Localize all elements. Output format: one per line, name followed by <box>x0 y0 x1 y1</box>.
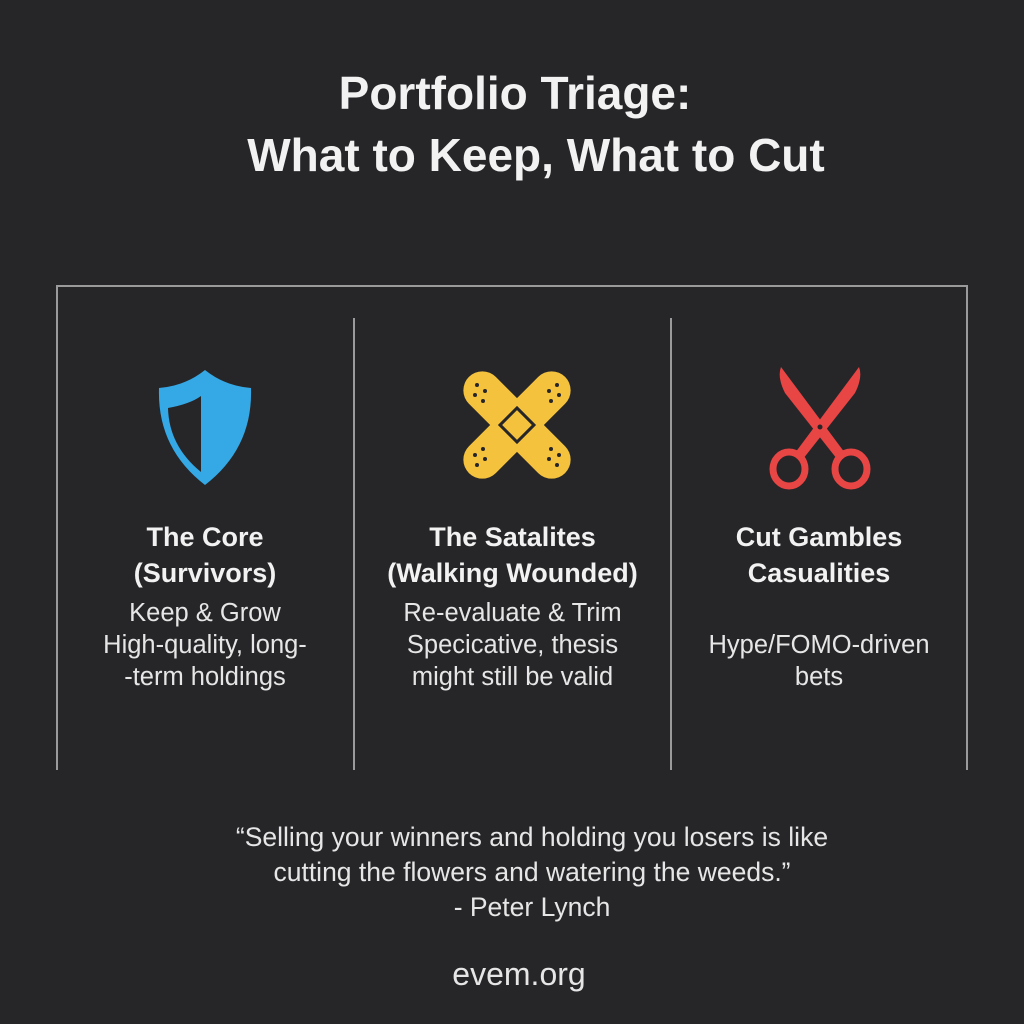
icon: scissors <box>770 367 870 490</box>
column 3 text: Cut Gambles <box>736 522 902 552</box>
title: Portfolio Triage: <box>339 67 691 119</box>
column 1 text <box>103 522 307 691</box>
column 1 text: High-quality, long- <box>103 631 307 659</box>
column 2 text: Re-evaluate & Trim <box>403 599 622 627</box>
quote: “Selling your winners and holding you losers is like <box>236 822 828 852</box>
column 2 text: Specicative, thesis <box>407 631 618 659</box>
column 1 text: (Survivors) <box>134 558 276 588</box>
column 1 text: Keep & Grow <box>129 599 281 627</box>
column 2 text: The Satalites <box>429 522 596 552</box>
title <box>247 67 825 181</box>
column 3 text: Casualities <box>748 558 890 588</box>
column 3 text: bets <box>795 663 843 691</box>
icon: shield <box>158 370 252 485</box>
column 2 text: (Walking Wounded) <box>387 558 638 588</box>
column 2 text: might still be valid <box>412 663 613 691</box>
column 3 text <box>708 522 930 691</box>
footer: evem.org <box>452 956 586 992</box>
quote: cutting the flowers and watering the weeds.” <box>273 857 791 887</box>
column 2 text <box>387 522 638 691</box>
column 1 text: The Core <box>146 522 264 552</box>
column 3 text: Hype/FOMO-driven <box>708 631 930 659</box>
icon: bandages <box>463 371 571 479</box>
title: What to Keep, What to Cut <box>247 129 825 181</box>
quote: - Peter Lynch <box>454 892 610 922</box>
column 1 text: -term holdings <box>124 663 286 691</box>
quote <box>236 822 828 922</box>
